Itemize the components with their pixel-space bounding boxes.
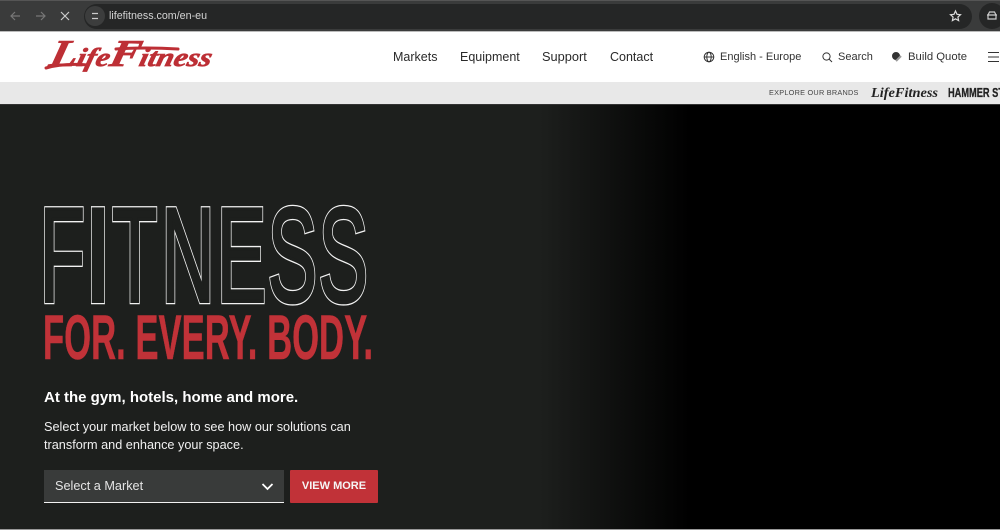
header nav bar: Support [542,49,587,64]
view more button: VIEW MORE [302,480,366,492]
brands label: EXPLORE OUR BRANDS [769,88,859,97]
browser icons [10,3,1000,29]
brand logos: LifeFitness [870,86,939,101]
browser toolbar [0,0,1000,32]
view more button [290,470,378,503]
url text: lifefitness.com/en-eu [109,10,207,22]
select label: Select a Market [55,478,143,492]
brand strip [0,82,1000,104]
utility icons [704,52,999,62]
nav links: Markets [393,50,437,64]
header nav bar: Equipment [460,50,520,64]
header nav bar [0,32,1000,82]
header nav bar: Contact [610,50,653,64]
hero bottom edge [0,529,1000,530]
header nav bar: Search [838,51,873,63]
body text: Select your market below to see how our solutions can [44,420,351,434]
hero headline [40,190,373,370]
utility links: English - Europe [720,51,801,63]
address bar [84,4,972,29]
market select [44,470,284,503]
brand logos [870,85,1000,101]
header nav bar: Build Quote [908,51,967,63]
chevron icon [262,483,274,490]
subheading: At the gym, hotels, home and more. [44,389,298,406]
body text: transform and enhance your space. [44,438,244,452]
body text [44,420,351,452]
